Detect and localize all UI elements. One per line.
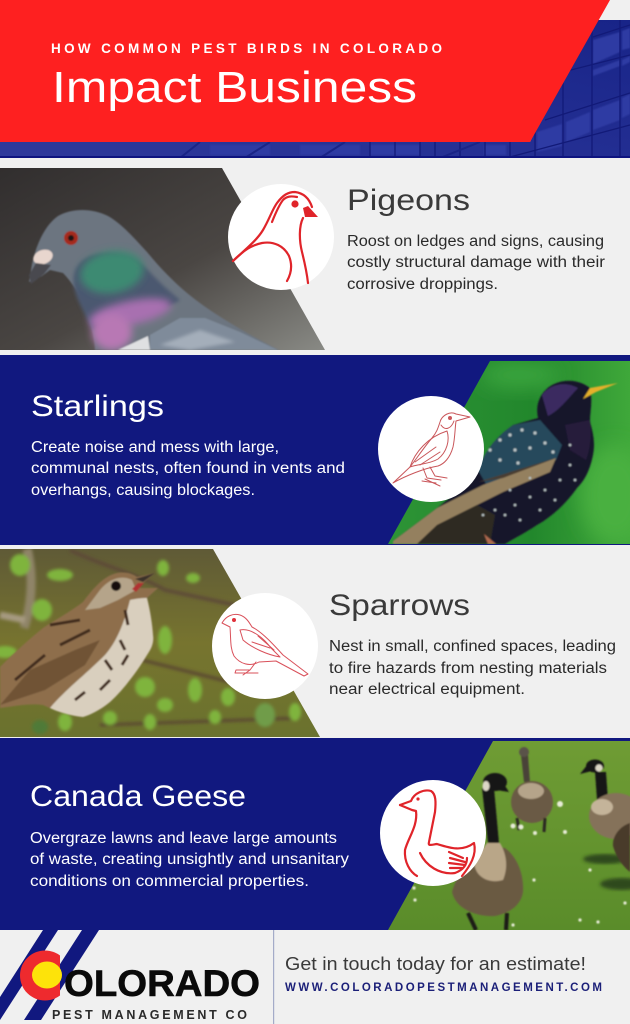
divider xyxy=(273,930,274,1024)
description xyxy=(329,638,616,698)
building photo strip xyxy=(0,20,630,160)
icon: starling xyxy=(378,396,484,502)
goose: front xyxy=(452,773,523,930)
description: of waste, creating unsightly and unsanitary xyxy=(30,851,349,868)
logo: Colorado Pest Management Co: PEST MANAGEMENT CO xyxy=(52,1008,247,1022)
photo: starling xyxy=(385,361,630,545)
description: costly structural damage with their xyxy=(347,254,605,271)
description xyxy=(31,439,345,499)
panel: pigeons xyxy=(0,161,630,354)
goose: rear centre xyxy=(511,747,553,832)
header kicker text: HOW COMMON PEST BIRDS IN COLORADO xyxy=(51,41,442,56)
description: overhangs, causing blockages. xyxy=(31,482,255,499)
icon: pigeon xyxy=(228,184,334,290)
heading: Canada Geese xyxy=(30,780,246,813)
heading: Sparrows xyxy=(329,589,470,622)
description xyxy=(347,233,605,293)
description: corrosive droppings. xyxy=(347,276,498,293)
logo: Colorado Pest Management Co xyxy=(0,930,260,1022)
website url: WWW.COLORADOPESTMANAGEMENT.COM xyxy=(285,982,602,994)
description: conditions on commercial properties. xyxy=(30,873,309,890)
description: Create noise and mess with large, xyxy=(31,439,279,456)
red banner shape xyxy=(0,0,610,142)
description: near electrical equipment. xyxy=(329,681,525,698)
photo: pigeon xyxy=(0,168,330,350)
footer xyxy=(0,930,630,1024)
panel: starlings xyxy=(0,355,630,545)
header banner xyxy=(0,0,630,160)
goose: right xyxy=(580,760,630,872)
photo: geese xyxy=(385,741,630,931)
description: Roost on ledges and signs, causing xyxy=(347,233,604,250)
main title: Impact Business xyxy=(52,63,417,112)
description: communal nests, often found in vents and xyxy=(31,460,345,477)
description: Overgraze lawns and leave large amounts xyxy=(30,830,337,847)
panel: canada geese xyxy=(0,738,630,931)
icon: sparrow xyxy=(212,593,318,699)
icon: goose xyxy=(380,780,486,886)
description: to fire hazards from nesting materials xyxy=(329,660,607,677)
call to action: Get in touch today for an estimate! xyxy=(285,954,586,974)
description: Nest in small, confined spaces, leading xyxy=(329,638,616,655)
logo: Colorado Pest Management Co: OLORADO xyxy=(64,963,260,1004)
description xyxy=(30,830,349,890)
panel: sparrows xyxy=(0,545,630,738)
heading: Pigeons xyxy=(347,184,470,217)
heading: Starlings xyxy=(31,390,164,423)
photo: sparrow xyxy=(0,549,325,737)
